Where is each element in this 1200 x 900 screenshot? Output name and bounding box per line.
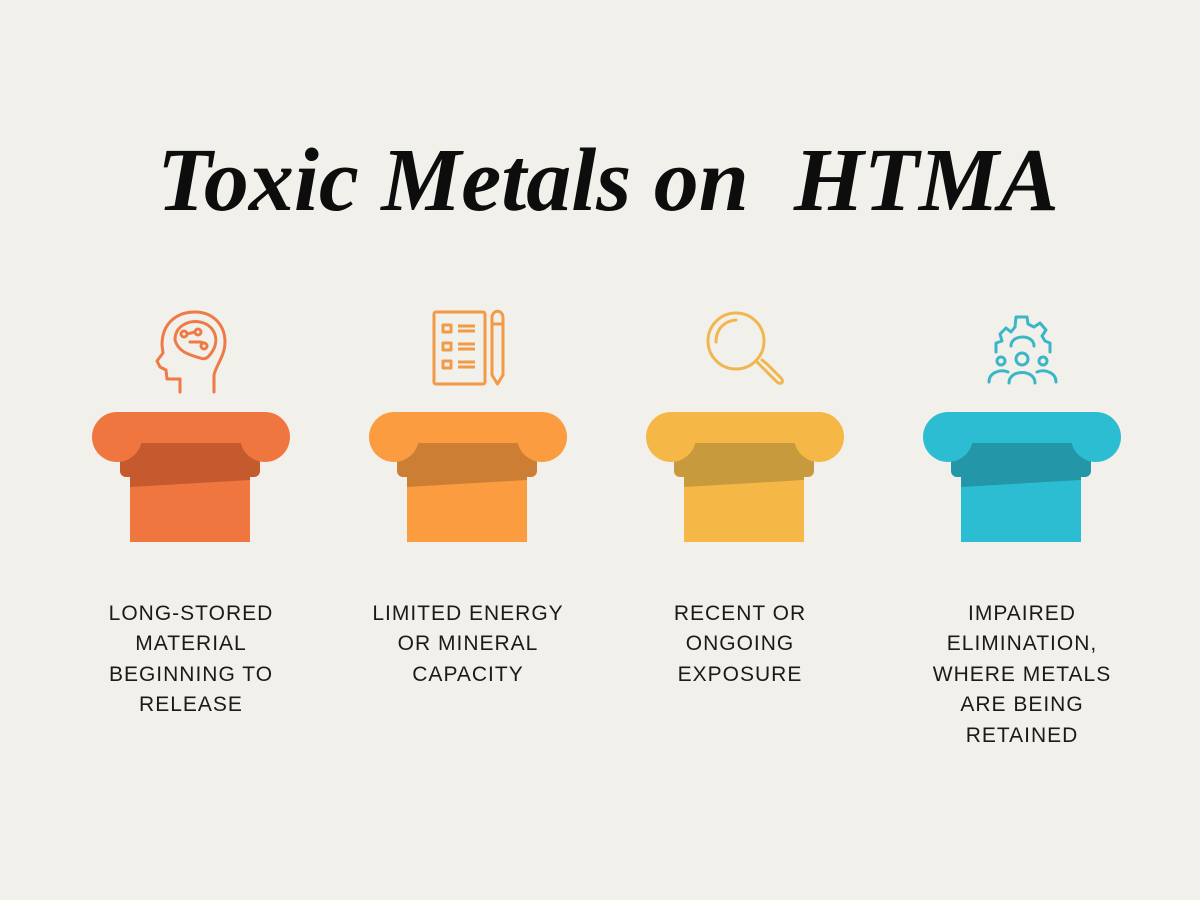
text: label 4: ELIMINATION,	[947, 632, 1097, 655]
icon: magnifier	[708, 313, 782, 383]
icon: checklist and pencil	[434, 311, 503, 384]
text: label 3: RECENT OR	[674, 602, 806, 625]
pillar 2	[369, 412, 567, 542]
text: label 2: CAPACITY	[412, 663, 524, 686]
pillar 4	[923, 412, 1121, 542]
text: label 1: MATERIAL	[135, 632, 247, 655]
text: label 4: ARE BEING	[960, 693, 1084, 716]
text: label 4: WHERE METALS	[933, 663, 1111, 686]
text: label 4: RETAINED	[966, 724, 1078, 747]
pillar 3	[646, 412, 844, 542]
title: Toxic Metals on HTMA	[157, 131, 1059, 230]
icon: head with brain	[157, 312, 225, 392]
text: label 1: BEGINNING TO	[109, 663, 273, 686]
pillar 1	[92, 412, 290, 542]
text: label 3: EXPOSURE	[678, 663, 802, 686]
text: label 4: IMPAIRED	[968, 602, 1076, 625]
text: label 1: RELEASE	[139, 693, 243, 716]
icon: gear and people	[989, 317, 1056, 383]
text: label 2: LIMITED ENERGY	[372, 602, 564, 625]
text: label 3: ONGOING	[686, 632, 794, 655]
text: label 1: LONG-STORED	[109, 602, 273, 625]
text: label 2: OR MINERAL	[398, 632, 538, 655]
